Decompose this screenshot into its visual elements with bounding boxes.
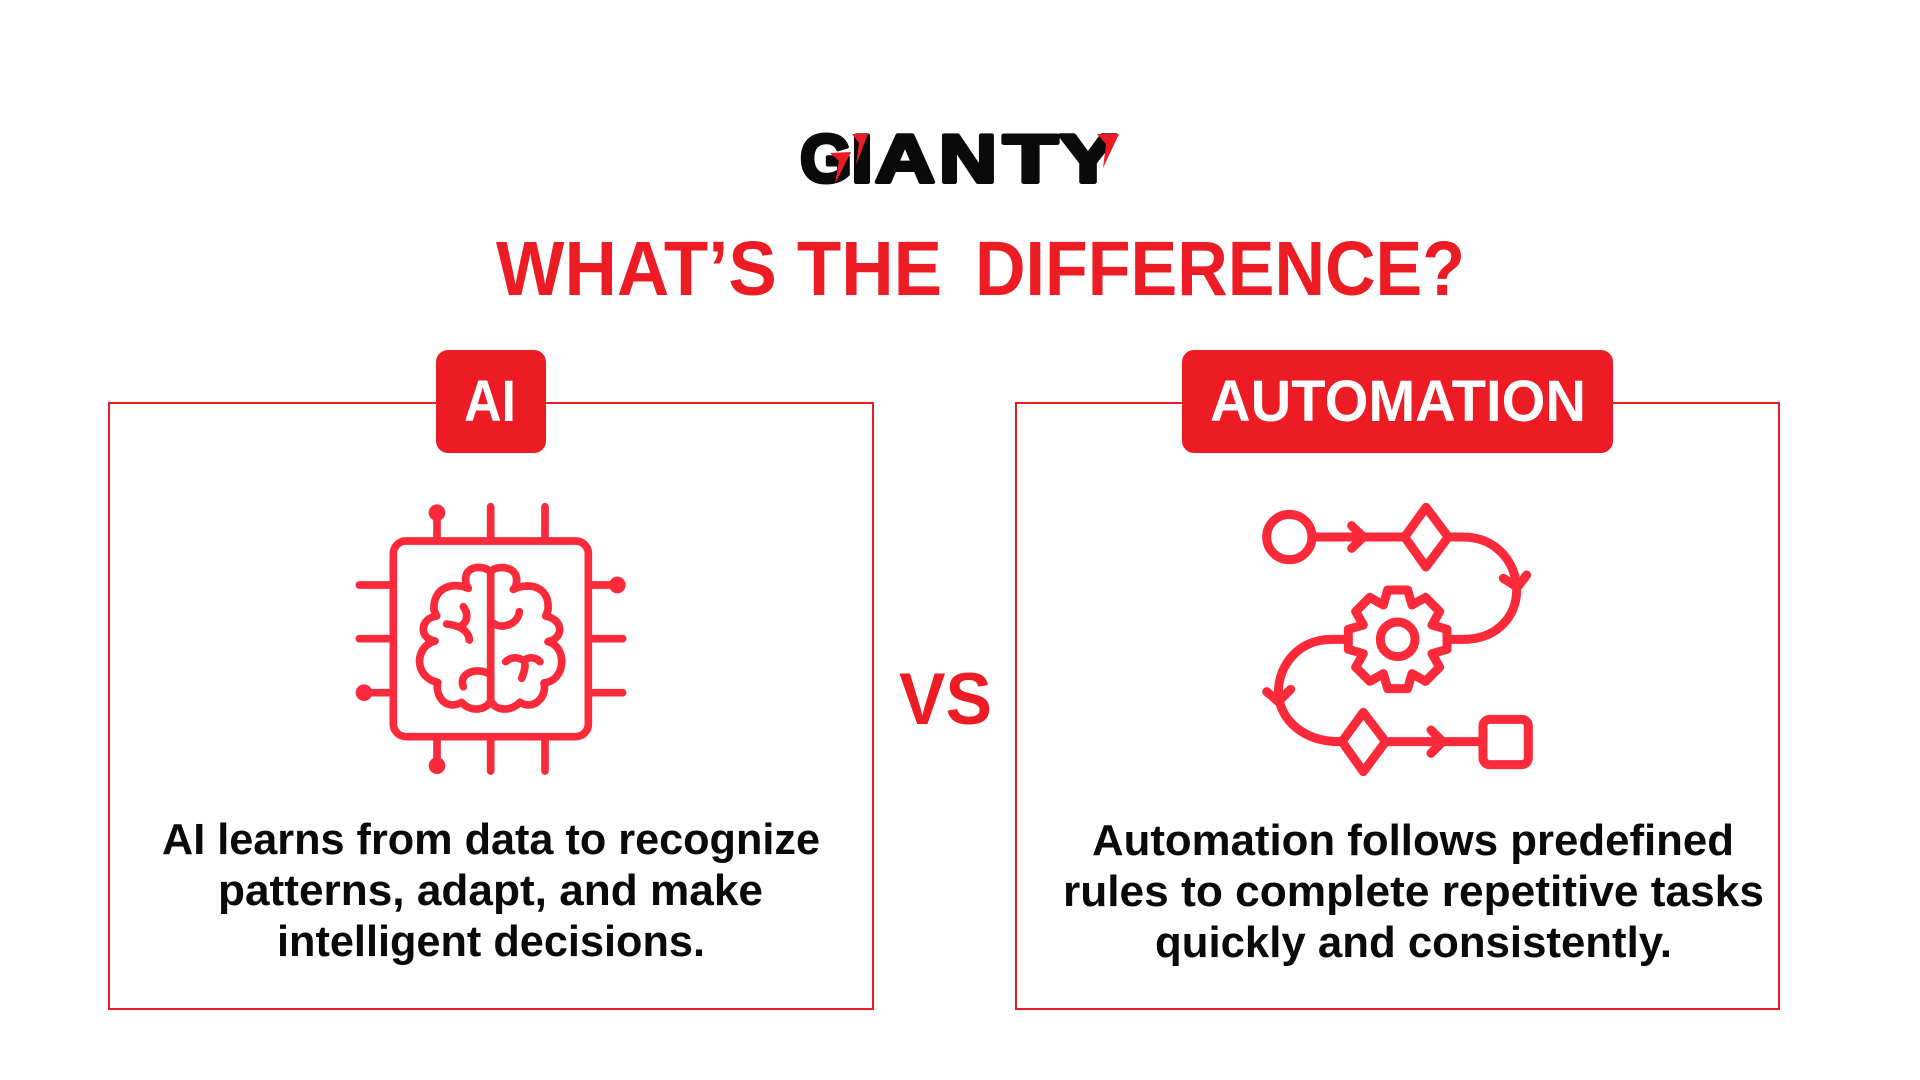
badge: Automation [1182,350,1613,453]
logo: GIANTY [800,121,1119,197]
label: VS: VS [899,659,992,740]
text: AI description: patterns, adapt, and make [218,866,763,915]
logo: GIANTY: A [875,121,935,197]
text: Automation description: quickly and consistently. [1155,918,1672,967]
text: Automation description: rules to complete repetitive tasks [1063,867,1764,916]
logo: GIANTY: G [800,121,852,197]
logo: GIANTY: Y [1059,121,1117,197]
text: Automation description: Automation follows predefined [1092,816,1734,865]
icon: brain on a chip [356,504,626,774]
panel: Automation [1016,350,1779,1009]
text: Automation description [1063,816,1764,967]
text: AI description: AI learns from data to recognize [162,815,820,864]
logo: GIANTY: N [939,121,997,197]
title [496,226,1465,312]
logo: GIANTY: I [851,121,873,197]
icon: automation workflow [1267,507,1528,772]
logo: GIANTY: T [1003,121,1058,197]
badge: AI [436,350,546,453]
text: AI description [162,815,820,966]
title: WHAT’S THE [496,226,942,312]
text: AI description: intelligent decisions. [277,917,705,966]
title: DIFFERENCE? [975,226,1465,312]
badge: Automation: AUTOMATION [1210,369,1586,434]
panel: AI [109,350,873,1009]
badge: AI: AI [464,369,516,434]
